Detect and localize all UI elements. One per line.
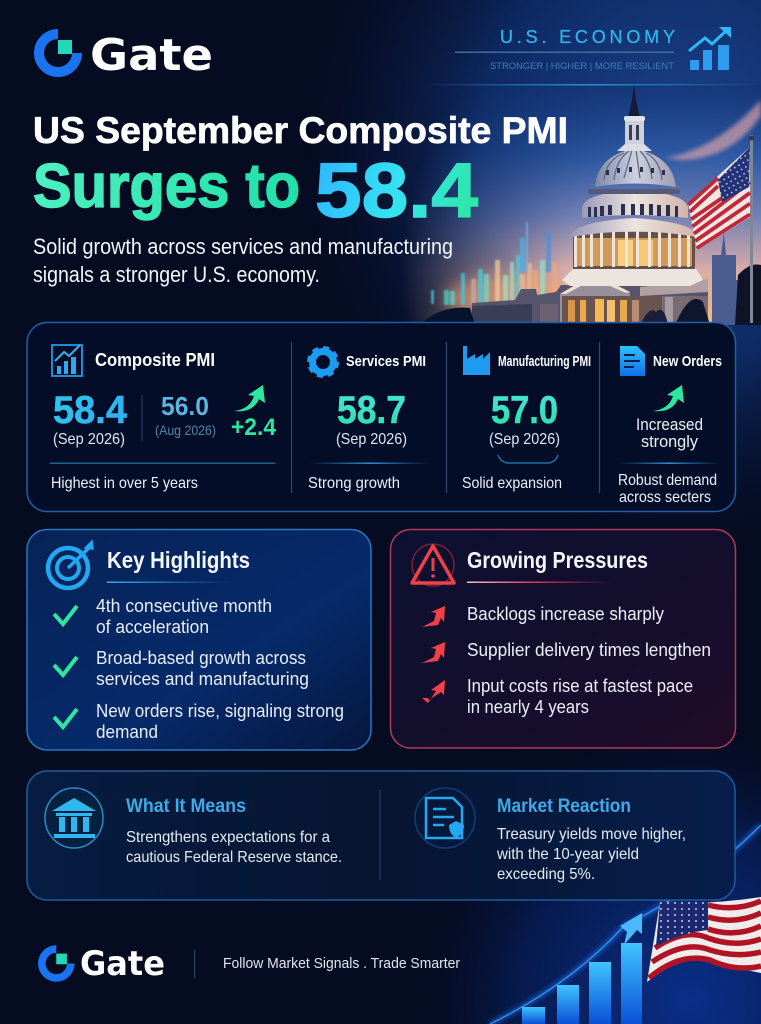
metric: New Orders: across secters [619,489,711,506]
panel: growing pressures [390,530,736,748]
panel: meaning and market reaction [27,771,735,900]
list: highlights: 4th consecutive month [96,596,272,616]
list: pressures: Input costs rise at fastest pace [467,676,693,696]
icon: Gate mark [39,34,77,72]
waving flag [647,897,761,982]
upper drum [582,190,688,218]
illustration: U.S. Capitol at sunset with flag [406,86,761,325]
illustration: rising bars and waving flag [490,825,761,1024]
title: 58.4 [315,148,478,234]
metric: New Orders: Robust demand [618,472,717,489]
icon: gear [309,348,337,376]
list: pressures [422,604,711,717]
metric: Manufacturing PMI: (Sep 2026) [489,431,560,448]
subtitle: signals a stronger U.S. economy. [33,262,320,287]
metric: Services PMI [308,348,430,492]
metric: New Orders: New Orders [653,353,722,370]
panel: PMI metrics [27,322,736,512]
panel: key highlights [27,530,371,750]
lantern and spire [625,120,644,148]
title: Surges to [33,152,300,221]
metric: Composite PMI: Highest in over 5 years [51,475,198,492]
metric: New Orders: strongly [641,432,698,451]
american flag [688,147,750,250]
metric: Composite PMI: Composite PMI [95,350,215,370]
panel: meaning and market reaction: What It Means [126,796,246,817]
stepped base [562,267,703,286]
icon: factory [463,346,490,375]
lower drum [573,232,695,269]
title: US September Composite PMI [33,110,568,151]
icon: document [620,346,645,376]
icon: red arrow [422,680,445,703]
metric: Services PMI: 58.7 [337,389,406,432]
metric: Services PMI: Strong growth [308,475,400,492]
panel: meaning and market reaction: Market Reaction [497,796,631,817]
panel: meaning and market reaction: with the 10-year yield [496,846,639,863]
metric: Composite PMI: (Aug 2026) [155,422,216,438]
panel: meaning and market reaction: cautious Federal Reserve stance. [126,849,342,866]
panel: meaning and market reaction: exceeding 5%. [497,866,595,883]
icon: document with shield [415,788,475,848]
list: pressures: Supplier delivery times lengthen [467,640,711,660]
footer logo: Gate: Gate [80,944,165,984]
treeline [420,308,475,325]
metric: New Orders: Increased [636,415,703,434]
title [33,110,568,234]
icon: composite chart [52,345,82,376]
distant tower [712,232,738,325]
icon: target [48,541,93,588]
list: highlights: of acceleration [96,617,209,637]
icon: arrow head [620,913,642,945]
metric: Composite PMI: 58.4 [53,389,127,432]
metric: Services PMI: Services PMI [346,353,426,370]
header glow line [420,84,761,86]
metric: Composite PMI: (Sep 2026) [53,431,125,448]
metric: New Orders [618,346,722,506]
icon: check [54,709,77,727]
footer logo: Gate [42,944,165,984]
icon: up arrow [653,385,684,411]
icon: up arrow [234,385,265,411]
metric: Manufacturing PMI: 57.0 [491,389,558,432]
list: highlights: New orders rise, signaling strong [96,701,344,721]
metric: Composite PMI: 56.0 [161,391,209,421]
metric: Services PMI: (Sep 2026) [336,431,407,448]
icon: red arrow [422,606,445,627]
metric: Composite PMI [50,345,277,492]
badge: U.S. Economy [455,27,731,72]
icon: red arrow [422,642,445,663]
metric: Composite PMI: +2.4 [231,414,277,441]
icon: warning triangle [412,544,454,586]
central portico [560,274,630,325]
skyline market chart [431,222,557,307]
icon: rising chart [689,27,731,70]
icon: check [54,657,77,675]
panel: key highlights: Key Highlights [107,547,250,573]
flagpole [750,135,753,323]
list: highlights: demand [96,722,158,742]
logo: Gate: Gate [90,30,213,81]
icon: Gate mark [42,949,71,978]
metric: Manufacturing PMI: Solid expansion [462,475,562,492]
list: highlights [54,596,344,742]
panel: meaning and market reaction: Treasury yields move higher, [497,826,686,843]
metric: Manufacturing PMI: Manufacturing PMI [498,353,591,370]
icon: check [54,606,77,624]
panel: growing pressures: Growing Pressures [467,547,648,573]
badge: U.S. Economy: U.S. ECONOMY [500,27,675,47]
metric: Manufacturing PMI [462,346,591,492]
badge: U.S. Economy: STRONGER | HIGHER | MORE RESILIENT [490,61,674,72]
tagline: Follow Market Signals . Trade Smarter [223,955,460,972]
list: highlights: Broad-based growth across [96,648,306,668]
logo: Gate [39,30,213,81]
subtitle: Solid growth across services and manufacturing [33,234,453,259]
subtitle [33,234,453,287]
icon: bank [45,788,103,848]
list: pressures: in nearly 4 years [467,697,589,717]
list: highlights: services and manufacturing [96,669,309,689]
dome [595,149,676,187]
list: pressures: Backlogs increase sharply [467,604,664,624]
panel: meaning and market reaction: Strengthens expectations for a [126,829,330,846]
capitol wings [472,285,708,325]
